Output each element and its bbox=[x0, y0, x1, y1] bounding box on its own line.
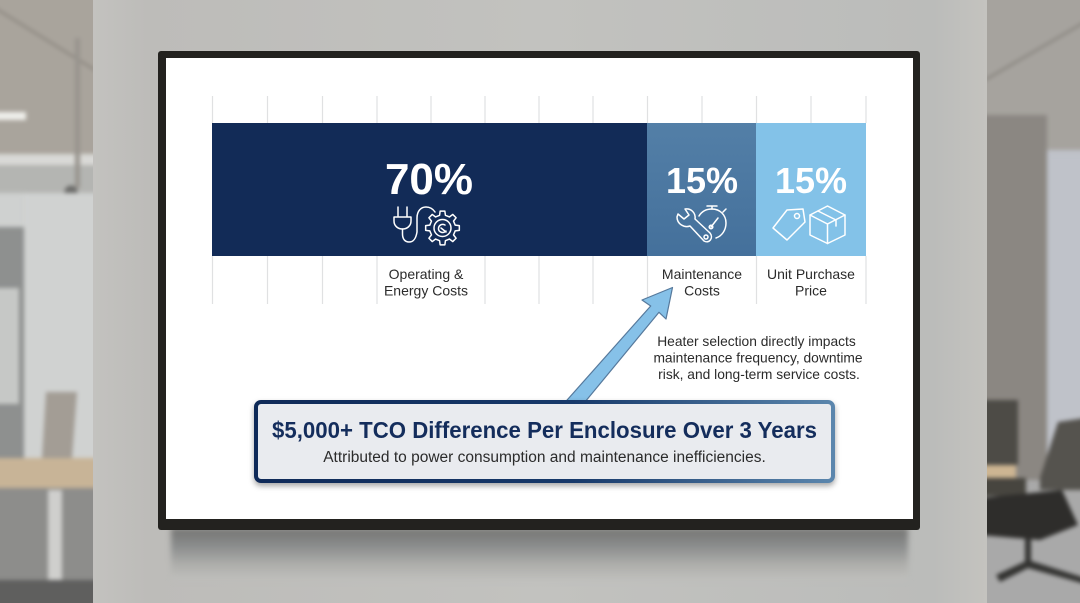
label: operating and energy costs: Operating & bbox=[389, 266, 463, 282]
annotation text: maintenance frequency, downtime bbox=[653, 350, 863, 366]
label: maintenance costs: Costs bbox=[684, 282, 720, 298]
callout box bbox=[256, 402, 833, 481]
annotation text: risk, and long-term service costs. bbox=[658, 367, 860, 382]
segment: operating and energy costs bbox=[212, 123, 647, 256]
display frame bbox=[158, 51, 920, 530]
segment: unit purchase price bbox=[756, 123, 866, 256]
callout subtext: Attributed to power consumption and maintenance inefficiencies. bbox=[323, 449, 766, 466]
screen content bbox=[212, 96, 866, 481]
blurred office background, left bbox=[0, 0, 100, 603]
segment: operating and energy costs: 70% bbox=[385, 155, 473, 204]
grid lines bbox=[212, 96, 866, 304]
callout heading: $5,000+ TCO Difference Per Enclosure Over 3 Years bbox=[272, 417, 817, 443]
segment: maintenance costs bbox=[647, 123, 756, 256]
label: unit purchase price: Price bbox=[795, 282, 827, 298]
icon: price tag and box bbox=[773, 206, 845, 244]
label: unit purchase price: Unit Purchase bbox=[767, 266, 855, 282]
display shadow on wall bbox=[171, 528, 908, 580]
label: maintenance costs: Maintenance bbox=[662, 266, 742, 282]
annotation text: Heater selection directly impacts bbox=[657, 334, 856, 349]
blurred office background, right bbox=[980, 0, 1080, 603]
icon: wrench and stopwatch bbox=[677, 206, 726, 242]
icon: plug and gear bbox=[394, 207, 459, 245]
stacked cost bar bbox=[212, 123, 866, 256]
segment: maintenance costs: 15% bbox=[666, 160, 738, 201]
arrow pointing to maintenance costs bbox=[560, 288, 672, 408]
label: operating and energy costs: Energy Costs bbox=[384, 282, 468, 298]
segment: unit purchase price: 15% bbox=[775, 160, 847, 201]
display screen bbox=[166, 58, 913, 519]
